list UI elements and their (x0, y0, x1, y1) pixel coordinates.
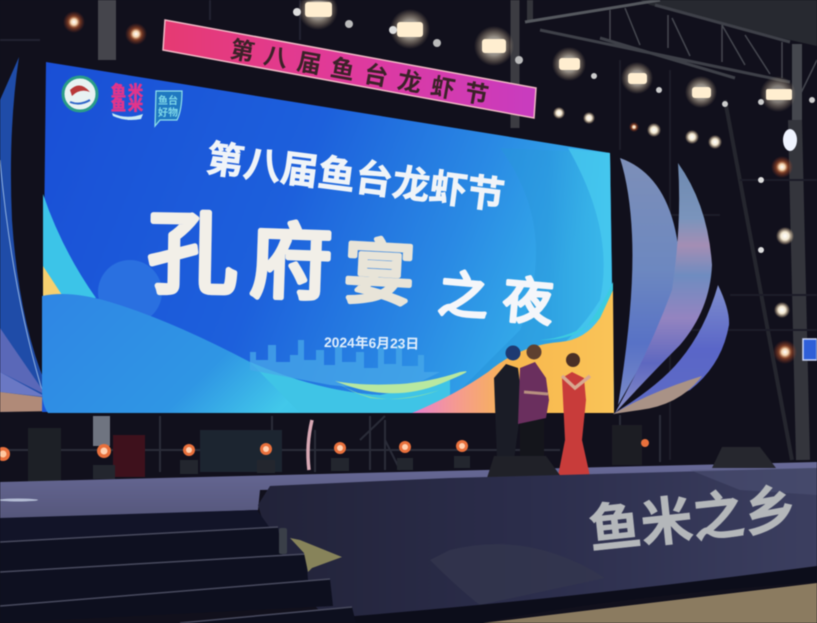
logo: pink characters: 鱼米 (111, 82, 143, 100)
host: woman in red dress (558, 353, 590, 476)
skyline (250, 340, 440, 392)
wooden ground (483, 583, 817, 623)
stage lights (63, 0, 815, 364)
backstage pillar and panels (28, 416, 642, 482)
screen decoration: orange wave (412, 290, 614, 413)
calligraphy: Kongfu Yan: 孔 (147, 205, 238, 307)
logo: speech bubble (155, 91, 182, 126)
bottle and star corner (279, 528, 342, 572)
logo: speech bubble: 鱼台 (158, 94, 178, 107)
subtitle: night: 之夜 (436, 266, 570, 333)
stairs (0, 510, 356, 623)
banner: festival name (163, 20, 536, 118)
stage front band: 鱼米之乡 (586, 481, 799, 560)
small blue side screen (803, 339, 817, 360)
calligraphy: Kongfu Yan: 府 (248, 217, 334, 311)
main LED screen (42, 62, 614, 413)
host: man in purple shirt (518, 344, 549, 460)
host: man in dark suit (494, 346, 522, 460)
screen decoration: right waves (450, 148, 614, 400)
moving head lights (0, 439, 649, 479)
banner: festival name: 第八届鱼台龙虾节 (228, 35, 501, 112)
logo: festival round emblem (63, 77, 97, 111)
floor monitor speakers (487, 447, 776, 478)
left sail decoration (0, 57, 58, 412)
screen title: 第八届鱼台龙虾节 (204, 137, 507, 217)
right sail decoration (613, 158, 729, 414)
screen decoration: left cyan fin (43, 194, 96, 298)
stage floor (0, 462, 817, 520)
logo: pink characters: 鱼米 (111, 96, 143, 114)
logo: speech bubble: 好物 (158, 106, 178, 119)
calligraphy: Kongfu Yan: 宴 (342, 233, 416, 315)
stage front band (258, 468, 817, 623)
truss structure (0, 0, 817, 460)
calligraphy: Kongfu Yan (147, 205, 416, 315)
logo: pink characters (111, 82, 143, 120)
screen decoration: bottom wave (42, 294, 450, 413)
date: 2024年6月23日 (324, 334, 419, 352)
under-stage rigging (0, 415, 660, 472)
